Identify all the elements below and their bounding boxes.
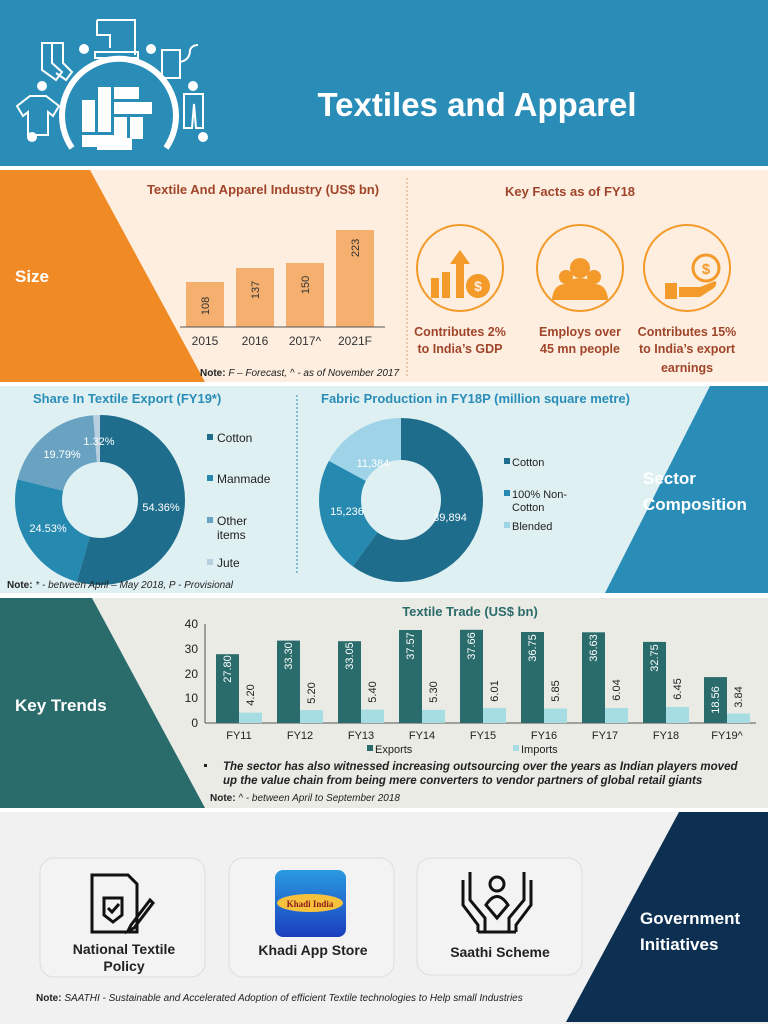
key facts: Employs over	[539, 325, 621, 339]
bar chart: textile trade: FY19^	[711, 730, 744, 742]
text block: outsourcing bullet: up the value chain from being mere converters to vendor partners of global retail giants	[223, 775, 702, 787]
bar chart: industry size: 2017^	[289, 334, 322, 348]
donut chart: share in textile export: Jute	[217, 556, 240, 570]
bar chart: textile trade: 33.05	[344, 642, 356, 670]
bar chart: industry size	[147, 182, 399, 379]
text block: outsourcing bullet	[204, 761, 738, 787]
donut chart: fabric production: 100% Non-	[512, 489, 567, 501]
panel: key trends	[0, 598, 768, 808]
bar chart: textile trade: 32.75	[649, 644, 661, 672]
header banner	[0, 0, 768, 166]
bar chart: industry size: 137	[250, 281, 262, 299]
panel: key trends: Note: ^ - between April to September 2018	[210, 793, 400, 804]
heading: sector composition: Composition	[643, 495, 747, 514]
donut chart: fabric production: 39,894	[433, 512, 467, 524]
bar chart: industry size: 223	[350, 239, 362, 257]
donut chart: share in textile export: Other	[217, 514, 247, 528]
donut chart: fabric production: Fabric Production in FY18P (million square metre)	[321, 391, 630, 406]
icon: textile emblem	[17, 20, 208, 150]
donut chart: share in textile export: 1.32%	[83, 436, 115, 448]
bar chart: industry size: 2016	[242, 334, 269, 348]
bar chart: textile trade: Imports	[521, 744, 558, 756]
donut chart: fabric production	[321, 391, 630, 561]
bar chart: textile trade: 0	[191, 716, 198, 730]
bar chart: industry size: 2021F	[338, 334, 372, 348]
key facts: to India’s GDP	[418, 342, 502, 356]
heading: government initiatives: Initiatives	[640, 935, 718, 954]
bar chart: textile trade: 20	[185, 667, 198, 681]
key facts: Contributes 15%	[638, 325, 736, 339]
key facts	[414, 184, 736, 375]
bar chart: textile trade: Exports	[375, 744, 413, 756]
bar chart: textile trade: 10	[185, 691, 198, 705]
bar chart: industry size: Textile And Apparel Industry (US$ bn)	[147, 182, 379, 197]
bar chart: textile trade: 27.80	[222, 655, 234, 683]
bar chart: textile trade: 37.66	[466, 632, 478, 660]
title: Textiles and Apparel	[317, 86, 637, 123]
donut chart: fabric production: 11,384	[357, 458, 389, 470]
donut chart: share in textile export: Manmade	[217, 472, 271, 486]
donut chart: fabric production: Blended	[512, 521, 552, 533]
key facts: to India’s export	[639, 342, 736, 356]
heading: key trends: Key Trends	[15, 696, 107, 715]
donut chart: fabric production: Cotton	[512, 457, 544, 469]
key facts: earnings	[661, 361, 713, 375]
panel: size	[0, 170, 768, 382]
icon: export earnings: $	[702, 261, 711, 278]
heading: sector composition: Sector	[643, 469, 696, 488]
icon: GDP growth: $	[474, 278, 482, 294]
card: national textile policy: Policy	[103, 958, 145, 974]
bar chart: textile trade: 3.84	[733, 686, 745, 708]
bar chart: textile trade: 36.63	[588, 634, 600, 662]
icon: GDP growth	[417, 225, 503, 311]
heading: size: Size	[15, 267, 49, 286]
key facts: 45 mn people	[540, 342, 620, 356]
card: saathi scheme: Saathi Scheme	[450, 944, 550, 960]
bar chart: textile trade: 6.01	[489, 680, 501, 702]
card: national textile policy: National Textile	[73, 941, 175, 957]
bar chart: textile trade	[185, 604, 756, 756]
key facts: Key Facts as of FY18	[505, 184, 635, 199]
bar chart: textile trade: 37.57	[405, 632, 417, 660]
panel: government initiatives	[0, 812, 768, 1024]
panel: government initiatives: Note: SAATHI - Sustainable and Accelerated Adoption of efficient Textile technologies to Help small Industries	[36, 993, 523, 1004]
panel: sector composition: Note: * - between April – May 2018, P - Provisional	[7, 580, 234, 591]
donut chart: share in textile export: 24.53%	[29, 523, 67, 535]
bar chart: textile trade: 18.56	[710, 686, 722, 714]
icon: khadi india app: Khadi India	[287, 899, 334, 909]
card: saathi scheme	[417, 858, 582, 975]
bar chart: textile trade: 6.45	[672, 678, 684, 700]
donut chart: share in textile export: 19.79%	[43, 449, 81, 461]
text block: outsourcing bullet: The sector has also witnessed increasing outsourcing over the years as Indian players moved	[223, 761, 738, 773]
donut chart: share in textile export	[29, 391, 271, 570]
heading: government initiatives: Government	[640, 909, 740, 928]
card: national textile policy	[40, 858, 205, 977]
bar chart: textile trade: FY16	[531, 730, 557, 742]
icon: khadi india app	[275, 870, 346, 937]
donut chart: fabric production: Cotton	[512, 502, 544, 514]
donut chart: share in textile export: Share In Textile Export (FY19*)	[33, 391, 221, 406]
bar chart: textile trade: 5.30	[428, 681, 440, 703]
bar chart: industry size: 150	[300, 276, 312, 294]
icon: people	[537, 225, 623, 311]
donut chart: share in textile export: 54.36%	[142, 502, 180, 514]
icon: export earnings	[644, 225, 730, 311]
bar chart: textile trade: FY18	[653, 730, 679, 742]
bar chart: textile trade: 5.40	[367, 681, 379, 703]
bar chart: textile trade: 40	[185, 617, 198, 631]
bar chart: industry size: 108	[200, 297, 212, 315]
bar chart: textile trade: Textile Trade (US$ bn)	[402, 604, 538, 619]
bar chart: industry size: Note: F – Forecast, ^ - as of November 2017	[200, 368, 399, 379]
donut chart: share in textile export: items	[217, 528, 246, 542]
bar chart: textile trade: FY12	[287, 730, 313, 742]
card: khadi app store	[229, 858, 394, 977]
bar chart: textile trade: 4.20	[245, 684, 257, 706]
bar chart: textile trade: FY17	[592, 730, 618, 742]
key facts: Contributes 2%	[414, 325, 506, 339]
bar chart: textile trade: FY15	[470, 730, 496, 742]
bar chart: textile trade: 6.04	[611, 679, 623, 701]
bar chart: textile trade: FY14	[409, 730, 435, 742]
bar chart: industry size: 2015	[192, 334, 219, 348]
bar chart: textile trade: FY13	[348, 730, 374, 742]
card: khadi app store: Khadi App Store	[258, 942, 368, 958]
bar chart: textile trade: 5.20	[306, 682, 318, 704]
bar chart: textile trade: 5.85	[550, 680, 562, 702]
donut chart: fabric production: 15,236	[330, 506, 364, 518]
panel: sector composition	[0, 386, 768, 593]
bar chart: textile trade: 36.75	[527, 634, 539, 662]
bar chart: textile trade: 30	[185, 642, 198, 656]
bar chart: textile trade: 33.30	[283, 642, 295, 670]
bar chart: textile trade: FY11	[226, 730, 252, 742]
donut chart: share in textile export: Cotton	[217, 431, 252, 445]
